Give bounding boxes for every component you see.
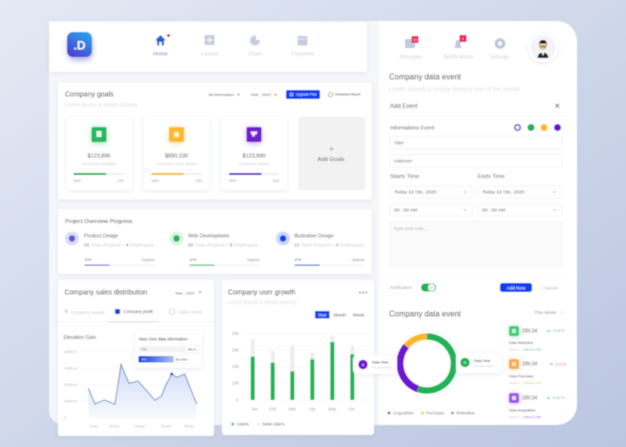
goal card: reward: 5000: [229, 179, 237, 183]
bar chart: Feb: [269, 406, 277, 412]
goal card: value assets: 5000: [152, 179, 159, 183]
form title: Add Event: [390, 104, 418, 110]
callout: data view green: For Description: [474, 364, 495, 368]
nav: layout: Layout: [201, 52, 218, 58]
legend: [388, 411, 476, 416]
add goals tile: [298, 117, 365, 190]
stat: data retention: +4.75 %: [552, 329, 564, 333]
select: end date: Today 22 Otc, 2020: [482, 190, 525, 196]
callout: data view green: Data View: [474, 359, 491, 363]
period tabs: Week: [353, 312, 365, 318]
project: illustration design: 37%: [294, 258, 301, 262]
project: product design: Targeted: [141, 258, 155, 262]
stat: data acquisition: 289,04: [522, 396, 538, 402]
period tabs: [315, 311, 365, 318]
legend: Purchase: [426, 411, 445, 416]
icon: notifications: 2: [462, 37, 464, 41]
dropdown: information: All Information: [208, 92, 234, 97]
add goals tile: Add Goals: [317, 157, 345, 163]
area chart: 20 km: [161, 424, 171, 428]
icon: settings: Settings: [490, 54, 510, 60]
nav: home: Home: [153, 52, 168, 58]
dropdown: year: Year : 2023: [250, 92, 272, 97]
icon: settings: [490, 38, 510, 60]
area chart: 10 km: [109, 424, 119, 428]
legend: Acquisition: [393, 411, 414, 416]
project: illustration design: [276, 232, 365, 266]
area chart: [64, 350, 197, 428]
select: start hour: [390, 204, 472, 216]
bar chart: 40k: [232, 331, 240, 336]
goal card: value assets: 33%: [195, 179, 202, 183]
nav: chart: Chart: [248, 52, 262, 58]
label: informations event: Informations Event: [390, 126, 435, 132]
icon: messages: [400, 36, 423, 60]
stat: data retention: [509, 326, 564, 352]
textarea: note: [390, 222, 562, 266]
project: product design: Product Design: [84, 234, 118, 240]
project: product design: [65, 232, 155, 266]
avatar: [528, 32, 558, 62]
bar chart: Jun: [348, 406, 356, 412]
area chart: 25 km: [184, 424, 194, 428]
bar chart: 10k: [232, 381, 240, 386]
nav: payment: [292, 36, 314, 58]
callout: data view green: [456, 353, 502, 373]
project: illustration design: Illustration Design: [294, 234, 334, 240]
label: ends time: Ends Time: [478, 174, 505, 180]
heading: company data event: Company data event: [389, 72, 462, 82]
panel: company data event chart: [353, 310, 566, 419]
tooltip: new user data: New User data information: [139, 336, 188, 342]
project: web development: Targeted: [246, 258, 260, 262]
tab: company reward: Company reward: [71, 310, 105, 315]
panel: project overview progress: [58, 209, 372, 274]
button: upgrade plan: [286, 90, 320, 99]
callout: data view purple: Data View: [372, 360, 389, 364]
project: web development: [170, 232, 260, 266]
nav: layout: [201, 35, 218, 58]
stat: data acquisition: Data Acquisition: [509, 408, 535, 412]
main left surface: [49, 21, 379, 425]
tooltip: new user data: $21,600k: [176, 358, 188, 362]
button: download report: Download Report: [335, 92, 361, 96]
icon: messages: Messages: [400, 54, 423, 60]
chart label: Elevation Gain: [64, 335, 96, 341]
goal card: reward: Company reward: [239, 161, 269, 166]
goal card: reward: $123,890: [243, 154, 265, 160]
tooltip: new user data: $94,7k: [188, 348, 197, 352]
callout: data view purple: For Description: [372, 366, 393, 370]
area chart: 1200 m: [64, 383, 77, 387]
bar chart: Jan: [251, 406, 259, 412]
project: illustration design: Targeted: [351, 258, 365, 262]
nav: payment: Payment: [292, 52, 314, 58]
heading: Project Overview Progress: [65, 219, 132, 225]
notification toggle: [390, 284, 436, 292]
goal card: value assets: Company value assets: [156, 161, 197, 166]
add goals tile: +: [329, 144, 334, 154]
bar chart: 0: [236, 398, 239, 402]
bar chart: May: [328, 406, 337, 412]
colour options: [515, 124, 561, 131]
tab: company profit active: [108, 309, 159, 322]
project: web development: 37%: [190, 258, 196, 262]
goal card: reward: 33%: [273, 179, 280, 183]
tooltip: new user data: 78%: [141, 358, 147, 362]
callout: data view purple: [353, 355, 397, 374]
icon: notifications: [444, 35, 474, 60]
stat: data acquisition: +0.87 %: [552, 396, 564, 400]
goal card: profitable: 5000: [74, 179, 81, 183]
stat: data purchase: -2.13 %: [555, 362, 566, 366]
period tabs: Year: [318, 312, 327, 318]
area chart: 0: [64, 416, 66, 420]
tooltip: new user data: 72%: [141, 348, 147, 352]
dropdown: information: [206, 89, 242, 100]
heading: Company data event: [389, 310, 462, 318]
icon: notifications: Notifications: [444, 54, 474, 60]
area chart: 1000 m: [64, 400, 77, 404]
button: upgrade plan: Upgrade Plan: [296, 93, 317, 97]
bar chart: 20k: [232, 364, 240, 369]
project: illustration design: 12 Total Projects • 3 Employees: [294, 242, 365, 248]
select: end hour: 00 : 00 AM: [482, 208, 505, 214]
bar chart: Apr: [309, 406, 316, 412]
callout: data view green: R: [464, 361, 467, 365]
goal card: profitable: [66, 117, 132, 190]
logo: [67, 32, 92, 60]
legend: [231, 422, 285, 427]
dropdown: year: Year : 2023: [175, 292, 194, 296]
project: web development: Web Development: [188, 234, 230, 240]
subheading: Lorem Ipsum is simply dummy: [228, 300, 297, 306]
callout: data view purple: A: [362, 363, 365, 367]
heading: Company sales distribution: [64, 290, 147, 296]
goal card: profitable: $123,890: [88, 154, 110, 160]
stat: data acquisition: Balance : 1,601,01 USD: [509, 415, 542, 419]
top navigation bar: [49, 22, 367, 72]
tab: company profit active: Company profit: [123, 309, 154, 314]
form: add event: [380, 104, 569, 292]
stat: data retention: 289,04: [522, 328, 538, 334]
legend: Users: [237, 422, 250, 427]
bar chart: [232, 331, 368, 412]
stat: data purchase: Data Purchase: [509, 374, 533, 378]
right panel surface: [379, 21, 577, 425]
nav: home: [153, 34, 170, 58]
heading: Company goals: [65, 92, 114, 98]
button: add new: [500, 283, 532, 292]
heading: Company user growth: [228, 290, 296, 296]
label: starts time: Starts Time: [390, 174, 419, 180]
project: web development: 30 Total Projects • 5 Employees: [188, 242, 259, 248]
goal card: profitable: 33%: [117, 179, 124, 183]
dropdown: this week: [534, 310, 564, 316]
legend: Retention: [456, 411, 476, 416]
select: start hour: 00 : 00 AM: [394, 208, 417, 214]
stat: data purchase: 289,04: [522, 362, 538, 368]
select: end date: [478, 186, 562, 198]
tab: data assets: Data Assets: [179, 310, 203, 314]
textarea: note: Type your note...: [394, 226, 428, 231]
goal card: value assets: $890,100: [165, 154, 188, 160]
input: title: [390, 136, 562, 149]
panel: company sales distribution: [58, 280, 214, 436]
area chart: 5 km: [90, 424, 98, 428]
subheading: Lorem Ipsum is simply dummy: [65, 102, 138, 108]
project: product design: 26 Total Projects • 4 Employees: [84, 242, 155, 248]
tab: data assets: [170, 309, 203, 314]
legend: New Users: [262, 422, 285, 427]
icon: messages: 10: [413, 38, 417, 42]
nav: chart: [248, 35, 262, 58]
area chart: 15 km: [135, 424, 145, 428]
stat: data purchase: [509, 359, 566, 385]
goal card: reward: [221, 117, 287, 190]
dropdown: this week: This Week: [534, 310, 557, 316]
stat: data retention: Data Retention: [509, 341, 534, 345]
panel: company user growth: [222, 280, 374, 435]
select: start date: Today 22 Otc, 2020: [394, 190, 437, 196]
stat: data acquisition: [509, 393, 564, 419]
subheading: Lorem Ipsum is simply dummy text of the printin: [389, 86, 521, 93]
area chart: 1400 m: [64, 366, 77, 370]
area chart: 1600 m: [64, 350, 77, 354]
dropdown: year: [248, 89, 279, 100]
logo: .D: [74, 38, 86, 52]
select: end hour: [478, 204, 562, 216]
panel: company goals: [58, 82, 372, 200]
select: start date: [390, 186, 472, 198]
period tabs: Month: [334, 312, 347, 318]
tooltip: new user data: [135, 331, 202, 368]
close icon: [555, 104, 559, 108]
input: address: [390, 154, 562, 167]
bar chart: 30k: [232, 348, 240, 352]
button: add new: Add New: [507, 285, 526, 290]
donut chart: [394, 330, 460, 396]
more menu: [359, 292, 367, 293]
bar chart: Mar: [289, 406, 297, 412]
input: address: Address*: [394, 158, 413, 164]
input: title: Title*: [394, 140, 405, 146]
goal card: profitable: Company profitable: [82, 161, 117, 166]
notification toggle: Notification: [390, 285, 413, 290]
button: cancel: Cancel: [543, 285, 558, 290]
project: product design: 37%: [84, 258, 91, 262]
goal card: value assets: [144, 117, 210, 190]
stat: data purchase: Balance : 1,601,01 USD: [509, 381, 542, 385]
stat: data retention: Balance : 1,601,01 USD: [509, 348, 542, 352]
